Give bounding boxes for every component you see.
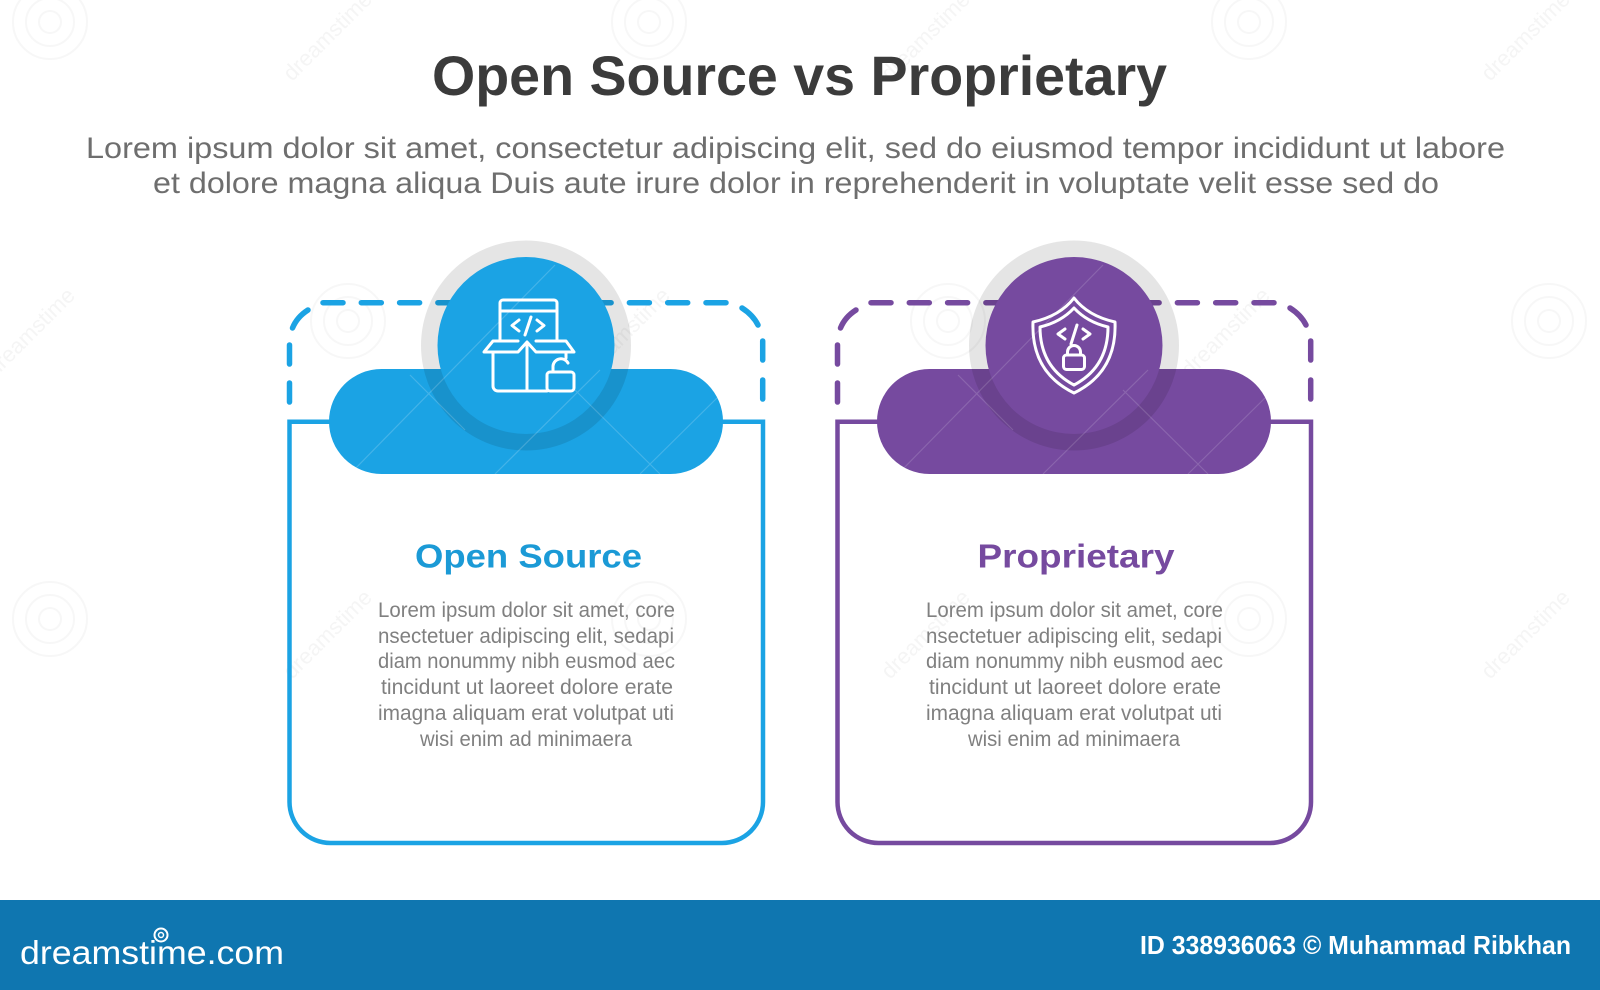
panel: open source <box>290 240 763 843</box>
body text: wisi enim ad minimaera <box>419 727 632 751</box>
card outline <box>290 422 763 843</box>
body text: nsectetuer adipiscing elit, sedapi <box>926 624 1222 648</box>
body text: imagna aliquam erat volutpat uti <box>926 701 1222 725</box>
infographic canvas: dreamstime <box>876 585 975 684</box>
body text: tincidunt ut laoreet dolore erate <box>381 675 673 699</box>
body text <box>926 598 1223 751</box>
label: open source: Open Source <box>415 538 642 574</box>
header pill <box>329 369 723 474</box>
infographic canvas: dreamstime <box>576 283 675 382</box>
label: proprietary: Proprietary <box>978 538 1175 574</box>
icon circle <box>986 257 1162 434</box>
infographic canvas: dreamstime <box>1476 585 1575 684</box>
title: Open Source vs Proprietary <box>432 44 1167 107</box>
panel: proprietary <box>838 240 1311 843</box>
card outline <box>838 422 1311 843</box>
subtitle: Lorem ipsum dolor sit amet, consectetur adipiscing elit, sed do eiusmod tempor incididunt ut labore <box>86 132 1505 165</box>
icon: shield with code and lock <box>1033 298 1115 393</box>
body text: diam nonummy nibh eusmod aec <box>378 649 675 673</box>
icon: code box with open lock <box>484 300 574 391</box>
image credit: ID 338936063 © Muhammad Ribkhan <box>1140 930 1571 960</box>
body text: Lorem ipsum dolor sit amet, core <box>926 598 1223 622</box>
body text <box>378 598 675 751</box>
body text: tincidunt ut laoreet dolore erate <box>929 675 1221 699</box>
icon circle <box>438 257 614 434</box>
body text: wisi enim ad minimaera <box>967 727 1180 751</box>
subtitle <box>86 132 1505 200</box>
icon ring <box>421 240 631 450</box>
body text: Lorem ipsum dolor sit amet, core <box>378 598 675 622</box>
subtitle: et dolore magna aliqua Duis aute irure dolor in reprehenderit in voluptate velit esse sed do <box>153 167 1439 200</box>
footer banner <box>0 900 1600 990</box>
header pill <box>877 369 1271 474</box>
footer logo: dreamstime.com <box>20 934 284 971</box>
infographic canvas: dreamstime <box>278 585 377 684</box>
body text: imagna aliquam erat volutpat uti <box>378 701 674 725</box>
body text: diam nonummy nibh eusmod aec <box>926 649 1223 673</box>
icon ring <box>969 240 1179 450</box>
body text: nsectetuer adipiscing elit, sedapi <box>378 624 674 648</box>
infographic canvas: dreamstime <box>1176 283 1275 382</box>
